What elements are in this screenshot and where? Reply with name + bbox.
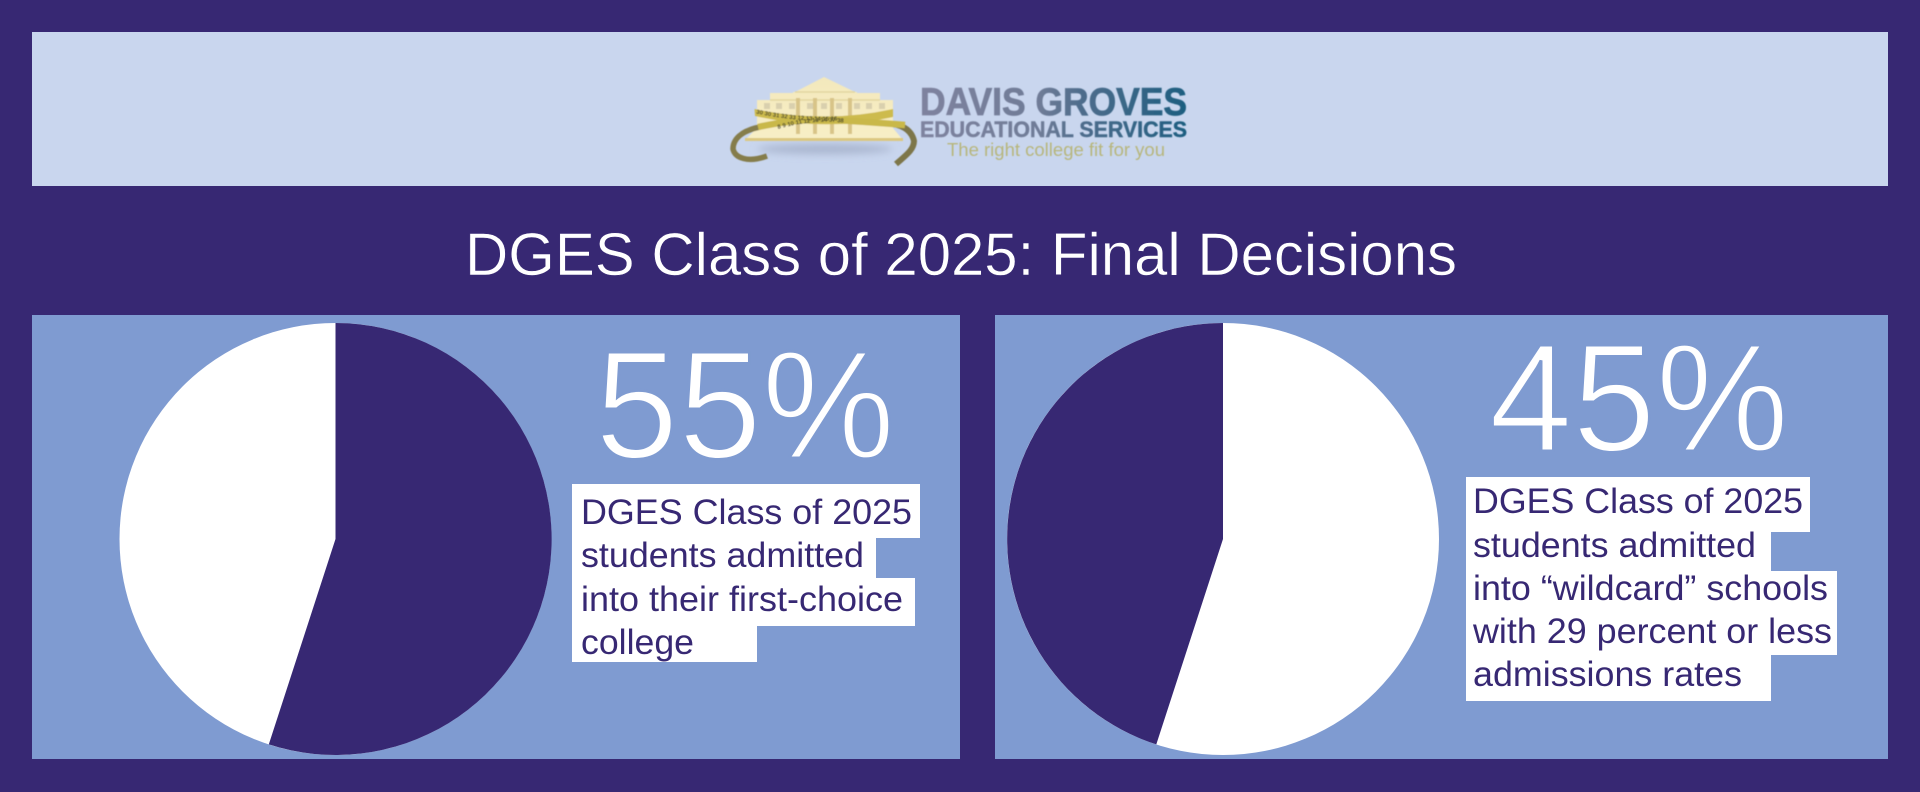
pie chart: 55 percent xyxy=(120,323,552,755)
description: wildcard schools: students admitted xyxy=(1473,525,1756,565)
statistic: 45%: 45% xyxy=(1489,312,1789,484)
panel: wildcard schools xyxy=(995,312,1888,759)
description: first-choice college: into their first-choice xyxy=(581,579,903,619)
description: wildcard schools: admissions rates xyxy=(1473,654,1742,694)
description: first-choice college xyxy=(572,484,920,662)
logo text: EDUCATIONAL SERVICES xyxy=(920,117,1187,142)
description: wildcard schools: DGES Class of 2025 xyxy=(1473,481,1803,521)
logo text xyxy=(920,81,1187,160)
logo: building with measuring tape: 30 30 31 32 33 12 13 14 15 16 xyxy=(756,109,838,122)
header banner xyxy=(32,32,1888,186)
description: first-choice college: DGES Class of 2025 xyxy=(581,492,912,532)
logo text: The right college fit for you xyxy=(947,139,1165,160)
logo text: DAVIS GROVES xyxy=(920,81,1187,124)
description: first-choice college: college xyxy=(581,622,694,662)
logo: building with measuring tape xyxy=(730,76,918,167)
logo: building with measuring tape: 8 9 10 11 12 13 14 37 38 xyxy=(777,117,844,130)
description: first-choice college: students admitted xyxy=(581,535,864,575)
description: wildcard schools: with 29 percent or less xyxy=(1472,611,1832,651)
description: wildcard schools: into “wildcard” schools xyxy=(1473,568,1828,608)
description: wildcard schools xyxy=(1466,477,1837,701)
title: DGES Class of 2025: Final Decisions xyxy=(465,221,1457,288)
pie chart: 45 percent xyxy=(1007,323,1439,755)
panel: first-choice college xyxy=(32,315,960,759)
statistic: 55%: 55% xyxy=(595,319,895,491)
